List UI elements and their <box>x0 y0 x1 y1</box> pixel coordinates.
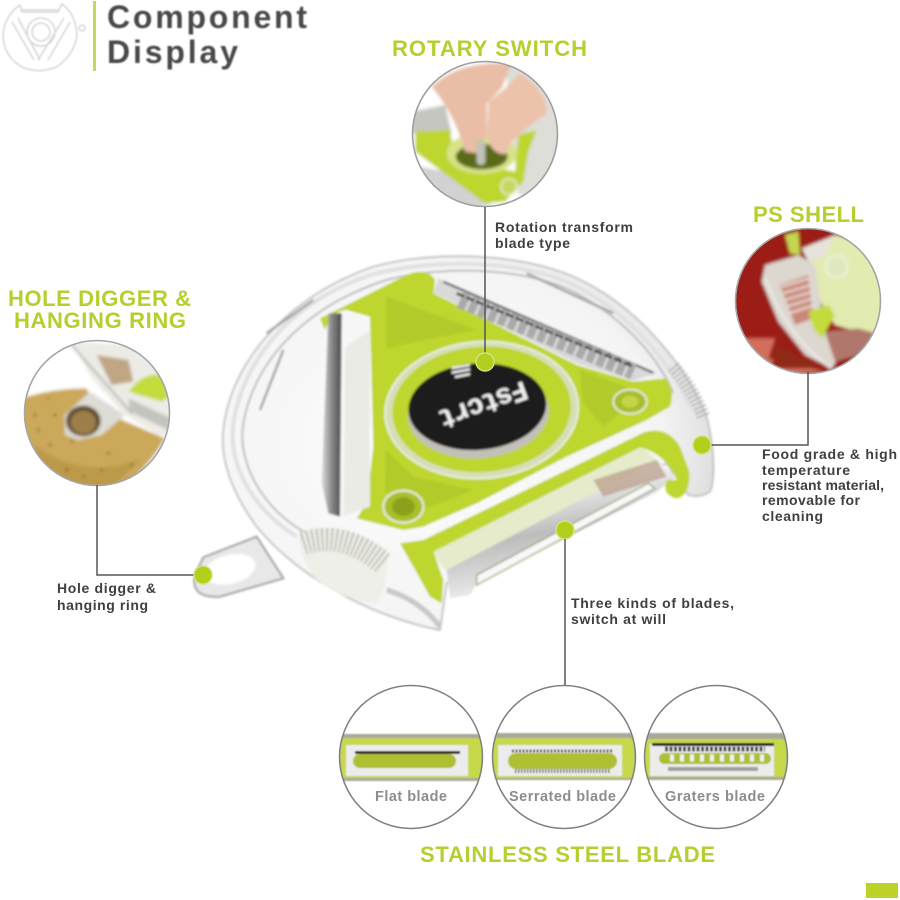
clear handle with ridges <box>299 367 703 627</box>
marker dot <box>194 566 212 584</box>
caption: hanging ring <box>57 597 148 613</box>
heading: ROTARY SWITCH <box>392 36 587 61</box>
leader line <box>97 485 203 575</box>
caption <box>57 580 156 613</box>
serrated blade circle: Serrated blade <box>509 789 616 805</box>
icon: peeler outline logo <box>3 4 85 71</box>
leader line <box>564 539 566 686</box>
serrated blade <box>433 278 657 381</box>
photo: shell on tomato <box>736 229 880 373</box>
heading: PS SHELL <box>753 202 864 227</box>
marker dot <box>693 436 711 454</box>
heading: Component <box>107 0 307 35</box>
flat blade circle: Flat blade <box>375 789 447 805</box>
central rotary ring <box>380 335 583 485</box>
panel: hole digger and hanging ring <box>8 286 212 613</box>
corner accent bar <box>866 883 898 898</box>
screws <box>383 390 647 523</box>
photo border <box>412 62 558 206</box>
leader line <box>484 207 486 362</box>
main peeler product illustration <box>194 256 713 630</box>
heading: HANGING RING <box>14 308 186 333</box>
shell inner rim <box>242 271 673 533</box>
heading: HOLE DIGGER & <box>8 286 191 311</box>
yellow lower arm <box>400 431 689 603</box>
caption: Three kinds of blades, <box>571 595 734 611</box>
divider bar <box>93 1 96 71</box>
caption <box>762 446 897 524</box>
heading <box>8 286 191 333</box>
caption: resistant material, <box>762 477 884 493</box>
lower flat blade <box>430 445 677 598</box>
flat blade circle <box>335 686 490 828</box>
photo border <box>736 228 880 374</box>
caption: cleaning <box>762 508 823 524</box>
transparent shell <box>223 256 713 630</box>
leader line <box>702 372 808 445</box>
heading: STAINLESS STEEL BLADE <box>420 842 715 867</box>
heading second line: Display <box>107 34 238 70</box>
graters blade circle <box>640 686 792 828</box>
serrated blade circle <box>490 686 640 828</box>
caption <box>495 219 633 251</box>
caption: switch at will <box>571 611 666 627</box>
caption: Rotation transform <box>495 219 633 235</box>
panel: stainless steel blade <box>335 521 792 867</box>
graters blade circle: Graters blade <box>665 789 765 805</box>
panel: ps shell <box>693 202 897 524</box>
photo border <box>24 340 170 486</box>
left flat blade <box>322 313 370 517</box>
caption: removable for <box>762 492 861 508</box>
brand mark: Fstcrt <box>433 372 531 433</box>
brand logo <box>452 365 470 377</box>
yellow frame recesses <box>385 297 643 508</box>
marker dot <box>556 521 574 539</box>
caption: Hole digger & <box>57 580 156 596</box>
caption: blade type <box>495 235 570 251</box>
caption: Food grade & high <box>762 446 897 462</box>
hanging ring tab <box>194 537 283 597</box>
header: component display <box>3 0 307 71</box>
caption: temperature <box>762 462 850 478</box>
marker dot <box>476 353 494 371</box>
caption <box>571 595 734 627</box>
photo: fingers turning switch <box>413 62 557 206</box>
panel: rotary switch <box>392 36 633 371</box>
yellow triangular frame <box>320 272 672 530</box>
photo: digging potato eye <box>25 342 169 485</box>
